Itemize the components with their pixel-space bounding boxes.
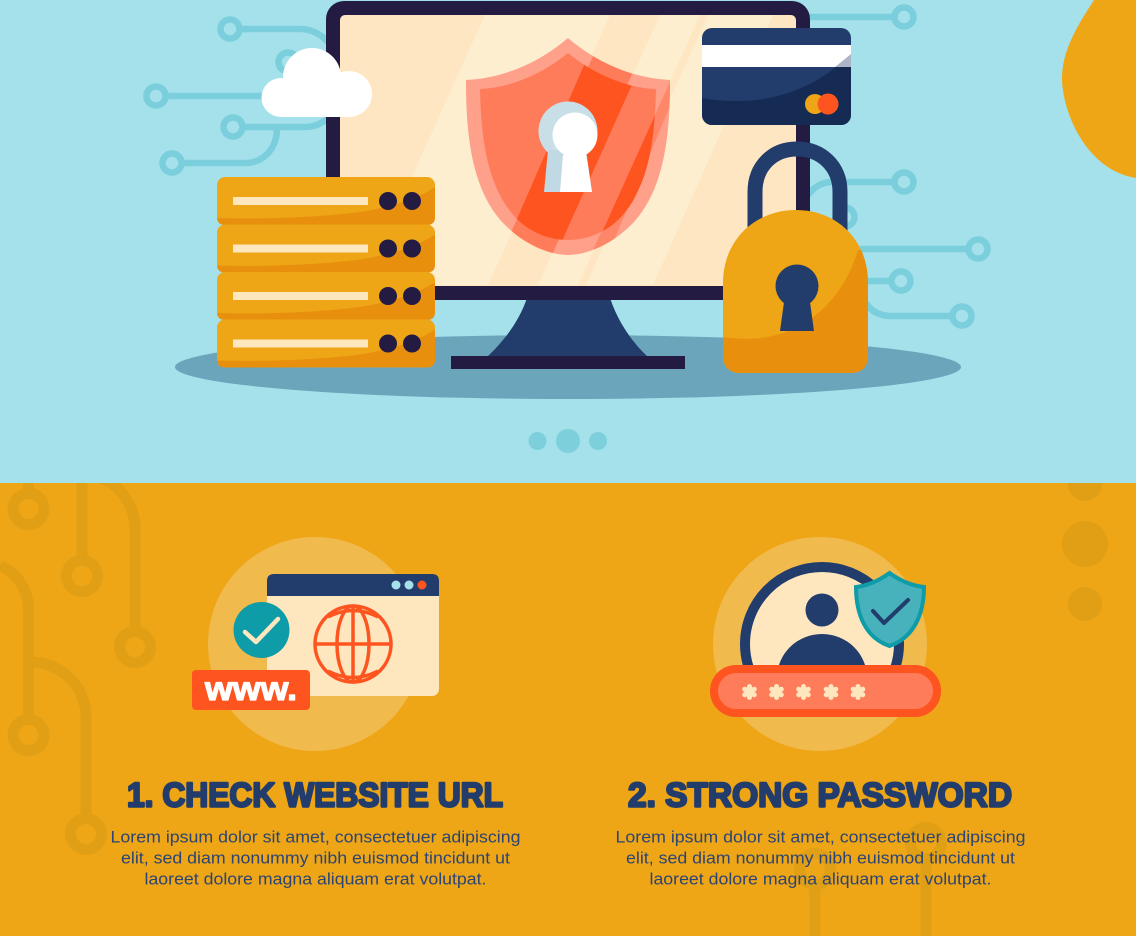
credit card [702, 28, 851, 125]
text block: strong password: elit, sed diam nonummy nibh euismod tincidunt ut [626, 848, 1015, 868]
www badge [192, 670, 310, 710]
icon backdrop circle [208, 537, 422, 751]
panel: hero background [0, 0, 1136, 483]
icon: strong password [713, 537, 937, 751]
carousel dots [528, 429, 607, 453]
padlock shackle [755, 149, 840, 235]
panel: orange tips section [0, 483, 1136, 936]
padlock body [723, 210, 868, 373]
server unit 2 [217, 224, 435, 272]
globe [315, 606, 391, 682]
password field [714, 669, 937, 713]
heading: strong password: 2. STRONG PASSWORD [628, 776, 1012, 814]
text block: strong password: Lorem ipsum dolor sit amet, consectetuer adipiscing [616, 828, 1026, 846]
browser window [267, 574, 439, 696]
monitor stand [487, 298, 648, 357]
padlock keyhole [776, 264, 818, 331]
server unit 3 [217, 272, 435, 320]
check badge [234, 602, 290, 658]
text block: strong password [616, 828, 1026, 888]
icon backdrop circle [713, 537, 927, 751]
text block: check website url: elit, sed diam nonummy nibh euismod tincidunt ut [121, 848, 510, 868]
monitor screen [340, 15, 796, 286]
www badge: www. [204, 670, 297, 707]
password asterisks [745, 686, 863, 698]
faint dots top right [1062, 483, 1108, 621]
ground shadow [175, 335, 961, 399]
orange blob top right [1062, 0, 1136, 178]
security shield [466, 38, 670, 255]
icon: website url [192, 537, 439, 751]
heading: check website url: 1. CHECK WEBSITE URL [127, 776, 503, 814]
text block: strong password: laoreet dolore magna aliquam erat volutpat. [650, 870, 992, 888]
faint circuit pattern left [0, 478, 150, 850]
shield check [856, 573, 924, 646]
server unit 4 [217, 320, 435, 368]
monitor frame [326, 1, 810, 300]
padlock [723, 149, 868, 373]
cloud [262, 48, 372, 117]
server unit 1 [217, 177, 435, 225]
text block: check website url: Lorem ipsum dolor sit amet, consectetuer adipiscing [110, 828, 520, 846]
faint circuit pattern bottom [800, 828, 942, 936]
text block: check website url: laoreet dolore magna aliquam erat volutpat. [144, 870, 486, 888]
server stack [217, 177, 435, 368]
shield keyhole [538, 102, 598, 192]
user avatar [740, 562, 904, 665]
circuit lines right [808, 8, 988, 326]
circuit lines left [146, 20, 328, 172]
monitor base [451, 356, 685, 369]
monitor [326, 1, 810, 369]
text block: check website url [110, 828, 520, 888]
